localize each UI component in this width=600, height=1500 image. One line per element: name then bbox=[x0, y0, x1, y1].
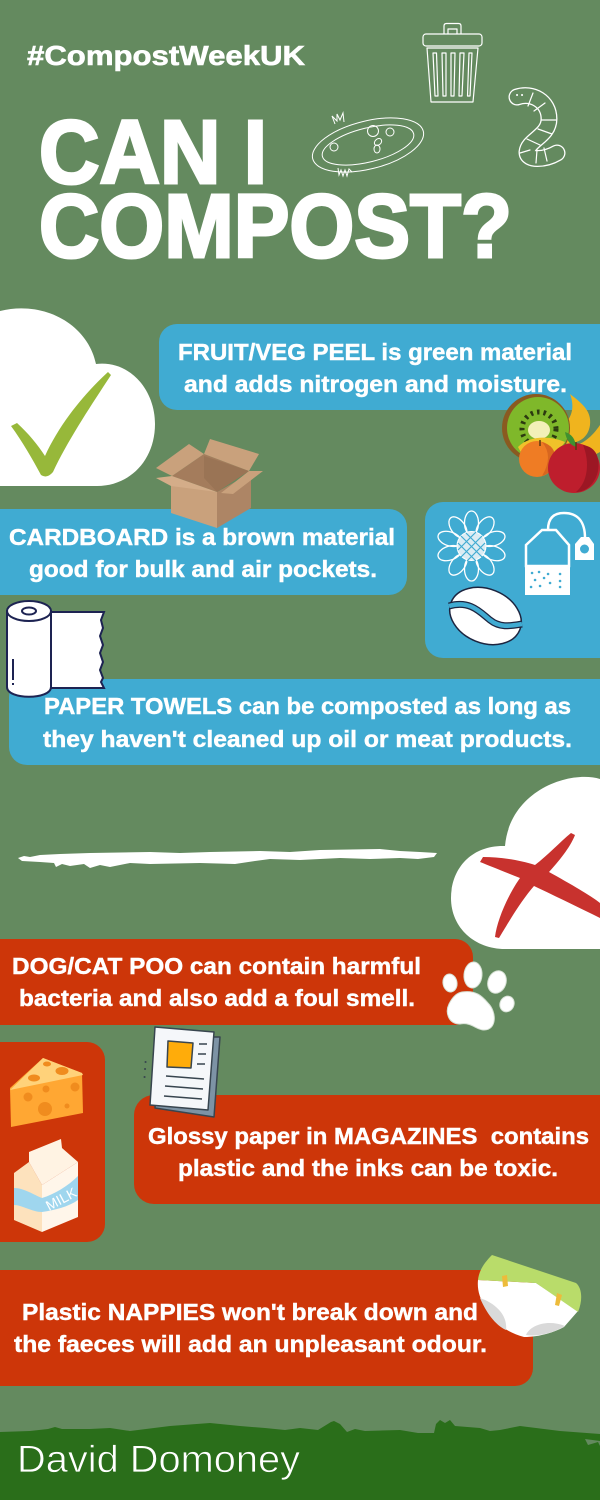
icon: paw print bbox=[442, 961, 517, 1030]
panel: flower, tea bag, coffee icons bbox=[425, 502, 600, 658]
brand name: David Domoney bbox=[17, 1439, 300, 1481]
icon: magazine bbox=[144, 1027, 220, 1117]
icon: rubbish bin bbox=[423, 24, 482, 102]
panel: paper towels bbox=[9, 679, 600, 765]
title: CAN I bbox=[39, 103, 267, 203]
icon: worm bbox=[517, 93, 557, 163]
panel: paper towels: they haven't cleaned up oil or meat products. bbox=[43, 726, 572, 752]
panel: dog and cat poo bbox=[0, 939, 473, 1025]
panel: cloud with cross bbox=[451, 777, 600, 949]
icon: tea bag bbox=[525, 513, 594, 595]
panel: cardboard: good for bulk and air pockets. bbox=[29, 556, 377, 582]
panel: dog and cat poo: bacteria and also add a foul smell. bbox=[19, 985, 415, 1011]
decorative brush divider bbox=[18, 849, 437, 868]
icon: coffee bean bbox=[441, 577, 530, 655]
icon: fruit bbox=[502, 394, 600, 493]
icon: cheese bbox=[10, 1058, 83, 1127]
panel: paper towels: PAPER TOWELS can be composted as long as bbox=[44, 693, 571, 719]
panel: cheese and milk bbox=[0, 1042, 105, 1242]
panel: magazines: Glossy paper in MAGAZINES contains bbox=[148, 1123, 589, 1149]
hashtag heading: #CompostWeekUK bbox=[27, 40, 305, 71]
icon: green tick bbox=[11, 372, 111, 476]
panel: nappies: the faeces will add an unpleasant odour. bbox=[14, 1331, 487, 1357]
panel: magazines bbox=[134, 1095, 600, 1204]
panel: fruit and veg peel bbox=[159, 324, 600, 410]
icon: paper towel roll bbox=[7, 601, 104, 697]
icon: red cross bbox=[480, 833, 600, 938]
title bbox=[39, 103, 512, 277]
panel: nappies bbox=[0, 1270, 533, 1386]
icon: flower bbox=[436, 511, 507, 581]
panel: nappies: Plastic NAPPIES won't break down and bbox=[22, 1299, 478, 1325]
panel: fruit and veg peel: and adds nitrogen and moisture. bbox=[184, 371, 567, 397]
panel: cloud with tick bbox=[0, 308, 155, 486]
icon: bacterium bbox=[307, 108, 429, 182]
title: COMPOST? bbox=[39, 177, 512, 277]
icon: nappy bbox=[478, 1255, 581, 1337]
panel: cardboard: CARDBOARD is a brown material bbox=[9, 524, 395, 550]
panel: dog and cat poo: DOG/CAT POO can contain harmful bbox=[12, 953, 421, 979]
icon: cardboard box bbox=[156, 439, 263, 528]
panel: magazines: plastic and the inks can be toxic. bbox=[178, 1155, 558, 1181]
icon: milk carton bbox=[14, 1139, 80, 1232]
footer: grass band bbox=[0, 1420, 600, 1500]
icon: milk carton: MILK bbox=[43, 1184, 80, 1214]
panel: cardboard bbox=[0, 439, 407, 595]
panel: fruit and veg peel: FRUIT/VEG PEEL is green material bbox=[178, 339, 572, 365]
